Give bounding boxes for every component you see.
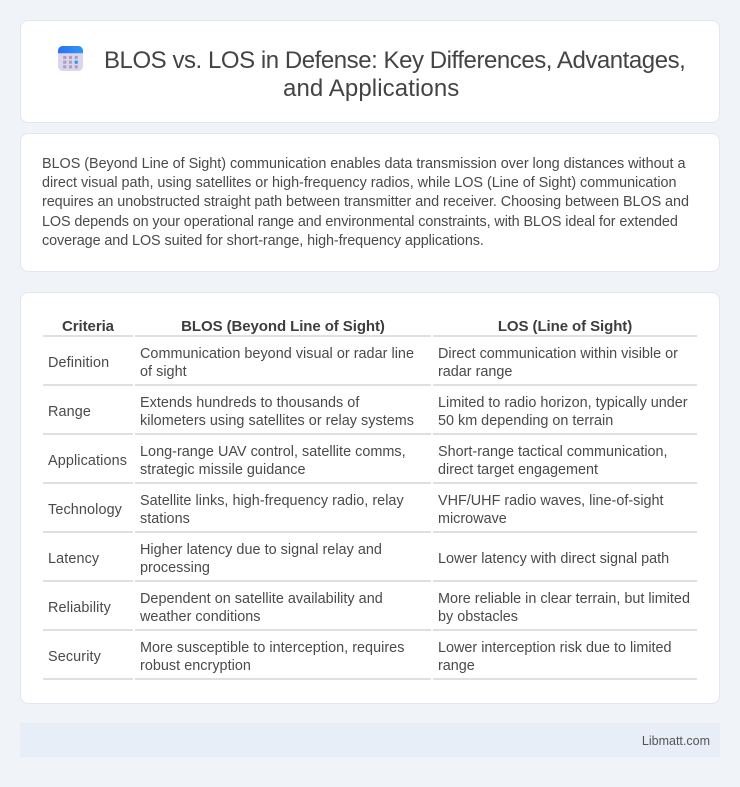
- text block: introduction: requires an unobstructed straight path between transmitter and receiver. Choosing between BLOS and: [42, 194, 689, 210]
- LOS security: [438, 640, 672, 674]
- text block: introduction: BLOS (Beyond Line of Sight) communication enables data transmission over long distances without a: [42, 156, 685, 172]
- BLOS latency: processing: [140, 560, 210, 576]
- BLOS reliability: Dependent on satellite availability and: [140, 591, 383, 607]
- BLOS applications: strategic missile guidance: [140, 462, 306, 478]
- LOS reliability: by obstacles: [438, 609, 518, 625]
- BLOS latency: Higher latency due to signal relay and: [140, 542, 382, 558]
- table header: LOS: LOS (Line of Sight): [498, 318, 632, 335]
- row label: Technology: Technology: [48, 502, 122, 518]
- footer text: Libmatt.com: [642, 734, 710, 748]
- BLOS security: robust encryption: [140, 658, 251, 674]
- panel: title card: [20, 20, 720, 123]
- panel: introduction: [20, 133, 720, 272]
- LOS applications: Short-range tactical communication,: [438, 444, 668, 460]
- text block: introduction: [42, 156, 689, 249]
- row label: Range: Range: [48, 404, 91, 420]
- LOS security: Lower interception risk due to limited: [438, 640, 672, 656]
- icon: calendar: [58, 46, 83, 71]
- BLOS range: kilometers using satellites or relay systems: [140, 413, 414, 429]
- row label: Applications: Applications: [48, 453, 127, 469]
- BLOS definition: Communication beyond visual or radar line: [140, 346, 414, 362]
- footer bar: [20, 723, 720, 757]
- LOS technology: [438, 493, 664, 527]
- LOS latency: Lower latency with direct signal path: [438, 551, 669, 567]
- row label: Definition: Definition: [48, 355, 109, 371]
- LOS reliability: More reliable in clear terrain, but limited: [438, 591, 690, 607]
- BLOS applications: [140, 444, 406, 478]
- LOS definition: radar range: [438, 364, 512, 380]
- title: BLOS vs. LOS in Defense: Key Differences, Advantages,: [104, 47, 685, 74]
- LOS security: range: [438, 658, 475, 674]
- BLOS reliability: weather conditions: [140, 609, 261, 625]
- BLOS technology: Satellite links, high-frequency radio, relay: [140, 493, 404, 509]
- BLOS latency: [140, 542, 382, 576]
- text block: introduction: LOS depends on your operational range and environmental constraints, with BLOS ideal for extended: [42, 214, 678, 230]
- BLOS definition: [140, 346, 414, 380]
- table header: BLOS: BLOS (Beyond Line of Sight): [181, 318, 385, 335]
- BLOS range: Extends hundreds to thousands of: [140, 395, 359, 411]
- BLOS security: More susceptible to interception, requires: [140, 640, 404, 656]
- LOS technology: VHF/UHF radio waves, line-of-sight: [438, 493, 664, 509]
- BLOS technology: [140, 493, 404, 527]
- BLOS reliability: [140, 591, 383, 625]
- LOS applications: direct target engagement: [438, 462, 598, 478]
- BLOS security: [140, 640, 404, 674]
- BLOS range: [140, 395, 414, 429]
- LOS reliability: [438, 591, 690, 625]
- LOS range: Limited to radio horizon, typically under: [438, 395, 688, 411]
- LOS definition: [438, 346, 678, 380]
- LOS technology: microwave: [438, 511, 507, 527]
- BLOS applications: Long-range UAV control, satellite comms,: [140, 444, 406, 460]
- LOS range: [438, 395, 688, 429]
- LOS definition: Direct communication within visible or: [438, 346, 678, 362]
- title: and Applications: [283, 75, 459, 102]
- LOS applications: [438, 444, 668, 478]
- row label: Reliability: Reliability: [48, 600, 111, 616]
- text block: introduction: direct visual path, using satellites or high-frequency radios, while LOS (Line of Sight) communication: [42, 175, 676, 191]
- BLOS definition: of sight: [140, 364, 187, 380]
- text block: introduction: coverage and LOS suited for short-range, high-frequency applications.: [42, 233, 484, 249]
- LOS range: 50 km depending on terrain: [438, 413, 613, 429]
- BLOS technology: stations: [140, 511, 190, 527]
- panel: comparison table: [20, 292, 720, 704]
- table header: criteria: Criteria: [62, 318, 114, 335]
- title: [104, 47, 685, 102]
- row label: Latency: Latency: [48, 551, 99, 567]
- row label: Security: Security: [48, 649, 101, 665]
